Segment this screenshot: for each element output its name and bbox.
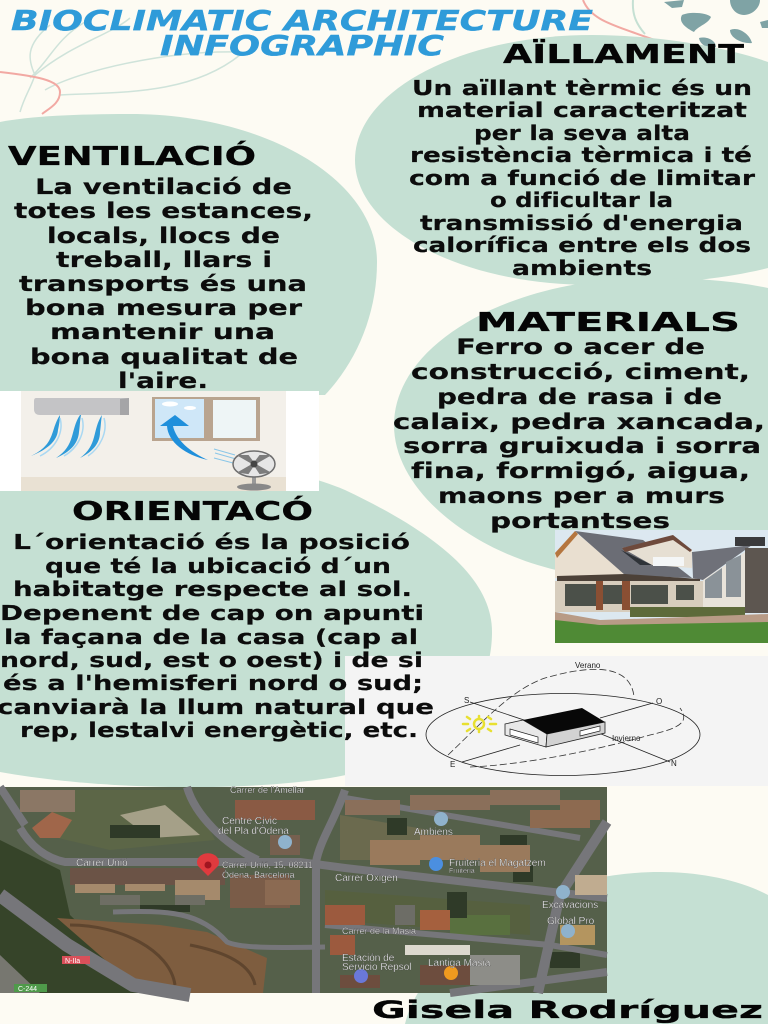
- map: road badges: N-IIa: [65, 958, 80, 965]
- text block: materials: sorra gruixuda i sorra: [403, 434, 761, 458]
- heading: aïllament: AÏLLAMENT: [503, 38, 744, 70]
- text block: ventilació: bona qualitat de: [30, 345, 298, 369]
- text block: aïllament: [409, 76, 755, 280]
- labels: compass and seasons: Verano: [575, 661, 601, 670]
- map: road badges: [14, 956, 90, 993]
- map: labels: Fruiteria: [449, 868, 475, 875]
- map: labels: Carrer Oxigen: [335, 873, 398, 884]
- text block: ventilació: transports és una: [19, 272, 307, 296]
- map: buildings: [20, 790, 607, 988]
- map: labels: [76, 785, 598, 973]
- map: labels: Carrer Unió: [76, 858, 128, 869]
- icon: air conditioner: [31, 398, 129, 458]
- title: INFOGRAPHIC: [160, 29, 445, 62]
- image: house photo: [555, 530, 768, 643]
- map: labels: Carrer de la Masia: [342, 926, 416, 936]
- text block: orientació: és a l'hemisferi nord o sud;: [3, 671, 423, 695]
- map: labels: Estación de: [342, 953, 395, 964]
- map: labels: del Pla d'Òdena: [218, 824, 289, 837]
- text block: ventilació: La ventilació de: [35, 175, 292, 199]
- text block: orientació: Depenent de cap on apunti: [0, 601, 424, 625]
- heading: orientació: ORIENTACÓ: [72, 495, 313, 527]
- text block: materials: portantses: [490, 509, 670, 533]
- text block: aïllament: calorífica entre els dos: [413, 233, 751, 257]
- text block: materials: Ferro o acer de: [456, 335, 705, 359]
- map: labels: Carrer Unió, 15, 08211: [222, 860, 313, 870]
- text block: materials: construcció, ciment,: [411, 360, 750, 384]
- labels: compass and seasons: N: [671, 759, 677, 768]
- panel: ventilació blob: [0, 114, 377, 395]
- map: fields and vegetation: [0, 790, 580, 993]
- image: solar orientation diagram: [345, 656, 768, 786]
- image: ventilation illustration: [0, 391, 319, 491]
- image: satellite map: [0, 785, 607, 995]
- map: labels: Ambiens: [414, 827, 453, 838]
- text block: ventilació: [14, 175, 313, 393]
- text block: orientació: L´orientació és la posició: [13, 530, 410, 554]
- text block: aïllament: o dificultar la: [490, 188, 673, 212]
- text block: aïllament: material caracteritzat: [417, 98, 748, 122]
- map: labels: Servicio Repsol: [342, 962, 411, 973]
- map: labels: Carrer de l'Amellar: [230, 785, 305, 795]
- map: labels: Òdena, Barcelona: [222, 870, 295, 880]
- map: labels: Lantiga Masia: [428, 958, 491, 969]
- text block: materials: calaix, pedra xancada,: [393, 410, 765, 434]
- labels: compass and seasons: Invierno: [612, 734, 641, 743]
- text block: orientació: nord, sud, est o oest) i de si: [0, 648, 423, 672]
- icon: sun: [463, 716, 496, 732]
- text block: aïllament: per la seva alta: [474, 121, 690, 145]
- heading: ventilació: VENTILACIÓ: [8, 140, 256, 172]
- text block: materials: [393, 335, 765, 533]
- decorative leaf and line background: [0, 0, 768, 114]
- text block: aïllament: Un aïllant tèrmic és un: [412, 76, 752, 100]
- text block: ventilació: totes les estances,: [14, 199, 313, 223]
- text block: aïllament: transmissió d'energia: [420, 211, 743, 235]
- map: labels: Global Pro: [547, 916, 595, 927]
- text block: ventilació: l'aire.: [118, 369, 208, 393]
- map: roads: [0, 787, 607, 995]
- text block: orientació: [0, 530, 434, 742]
- text block: aïllament: com a funció de limitar: [409, 166, 755, 190]
- panel: materials blob: [394, 278, 768, 570]
- labels: compass and seasons: O: [656, 697, 662, 706]
- text block: ventilació: locals, llocs de: [47, 224, 280, 248]
- labels: compass and seasons: [450, 661, 677, 769]
- arrow: air flow to window: [160, 415, 208, 460]
- icon: window: [152, 397, 260, 441]
- map: labels: Centre Cívic: [222, 816, 277, 827]
- map: road badges: C-244: [18, 986, 37, 993]
- labels: compass and seasons: S: [464, 696, 469, 705]
- text block: materials: pedra de rasa i de: [437, 385, 722, 409]
- title: BIOCLIMATIC ARCHITECTURE: [11, 4, 593, 37]
- text block: materials: maons per a murs: [438, 484, 725, 508]
- text block: orientació: habitatge respecte al sol.: [13, 577, 412, 601]
- panel: orientació blob: [0, 465, 492, 787]
- map: labels: Fruiteria el Magatzem: [449, 858, 546, 869]
- text block: aïllament: resistència tèrmica i té: [410, 143, 752, 167]
- text block: ventilació: treball, llars i: [56, 248, 272, 272]
- icon: house: [505, 708, 605, 747]
- map: labels: Excavacions: [542, 900, 598, 911]
- heading: materials: MATERIALS: [476, 308, 740, 338]
- text block: orientació: que té la ubicació d´un: [45, 554, 391, 578]
- text block: ventilació: mantenir una: [50, 320, 275, 344]
- map: pins: [197, 812, 575, 983]
- text block: aïllament: ambients: [512, 256, 652, 280]
- text block: orientació: canviarà la llum natural que: [0, 695, 434, 719]
- panel: aïllament blob: [355, 35, 768, 285]
- panel: bottom right blob: [405, 872, 768, 1024]
- text block: orientació: rep, lestalvi energètic, etc.: [20, 718, 418, 742]
- icon: fan: [214, 449, 275, 490]
- title: [11, 4, 593, 62]
- author name: Gisela Rodríguez: [372, 996, 763, 1024]
- text block: ventilació: bona mesura per: [25, 296, 303, 320]
- labels: compass and seasons: E: [450, 760, 455, 769]
- text block: materials: fina, formigó, aigua,: [411, 459, 750, 483]
- text block: orientació: la façana de la casa (cap al: [4, 625, 418, 649]
